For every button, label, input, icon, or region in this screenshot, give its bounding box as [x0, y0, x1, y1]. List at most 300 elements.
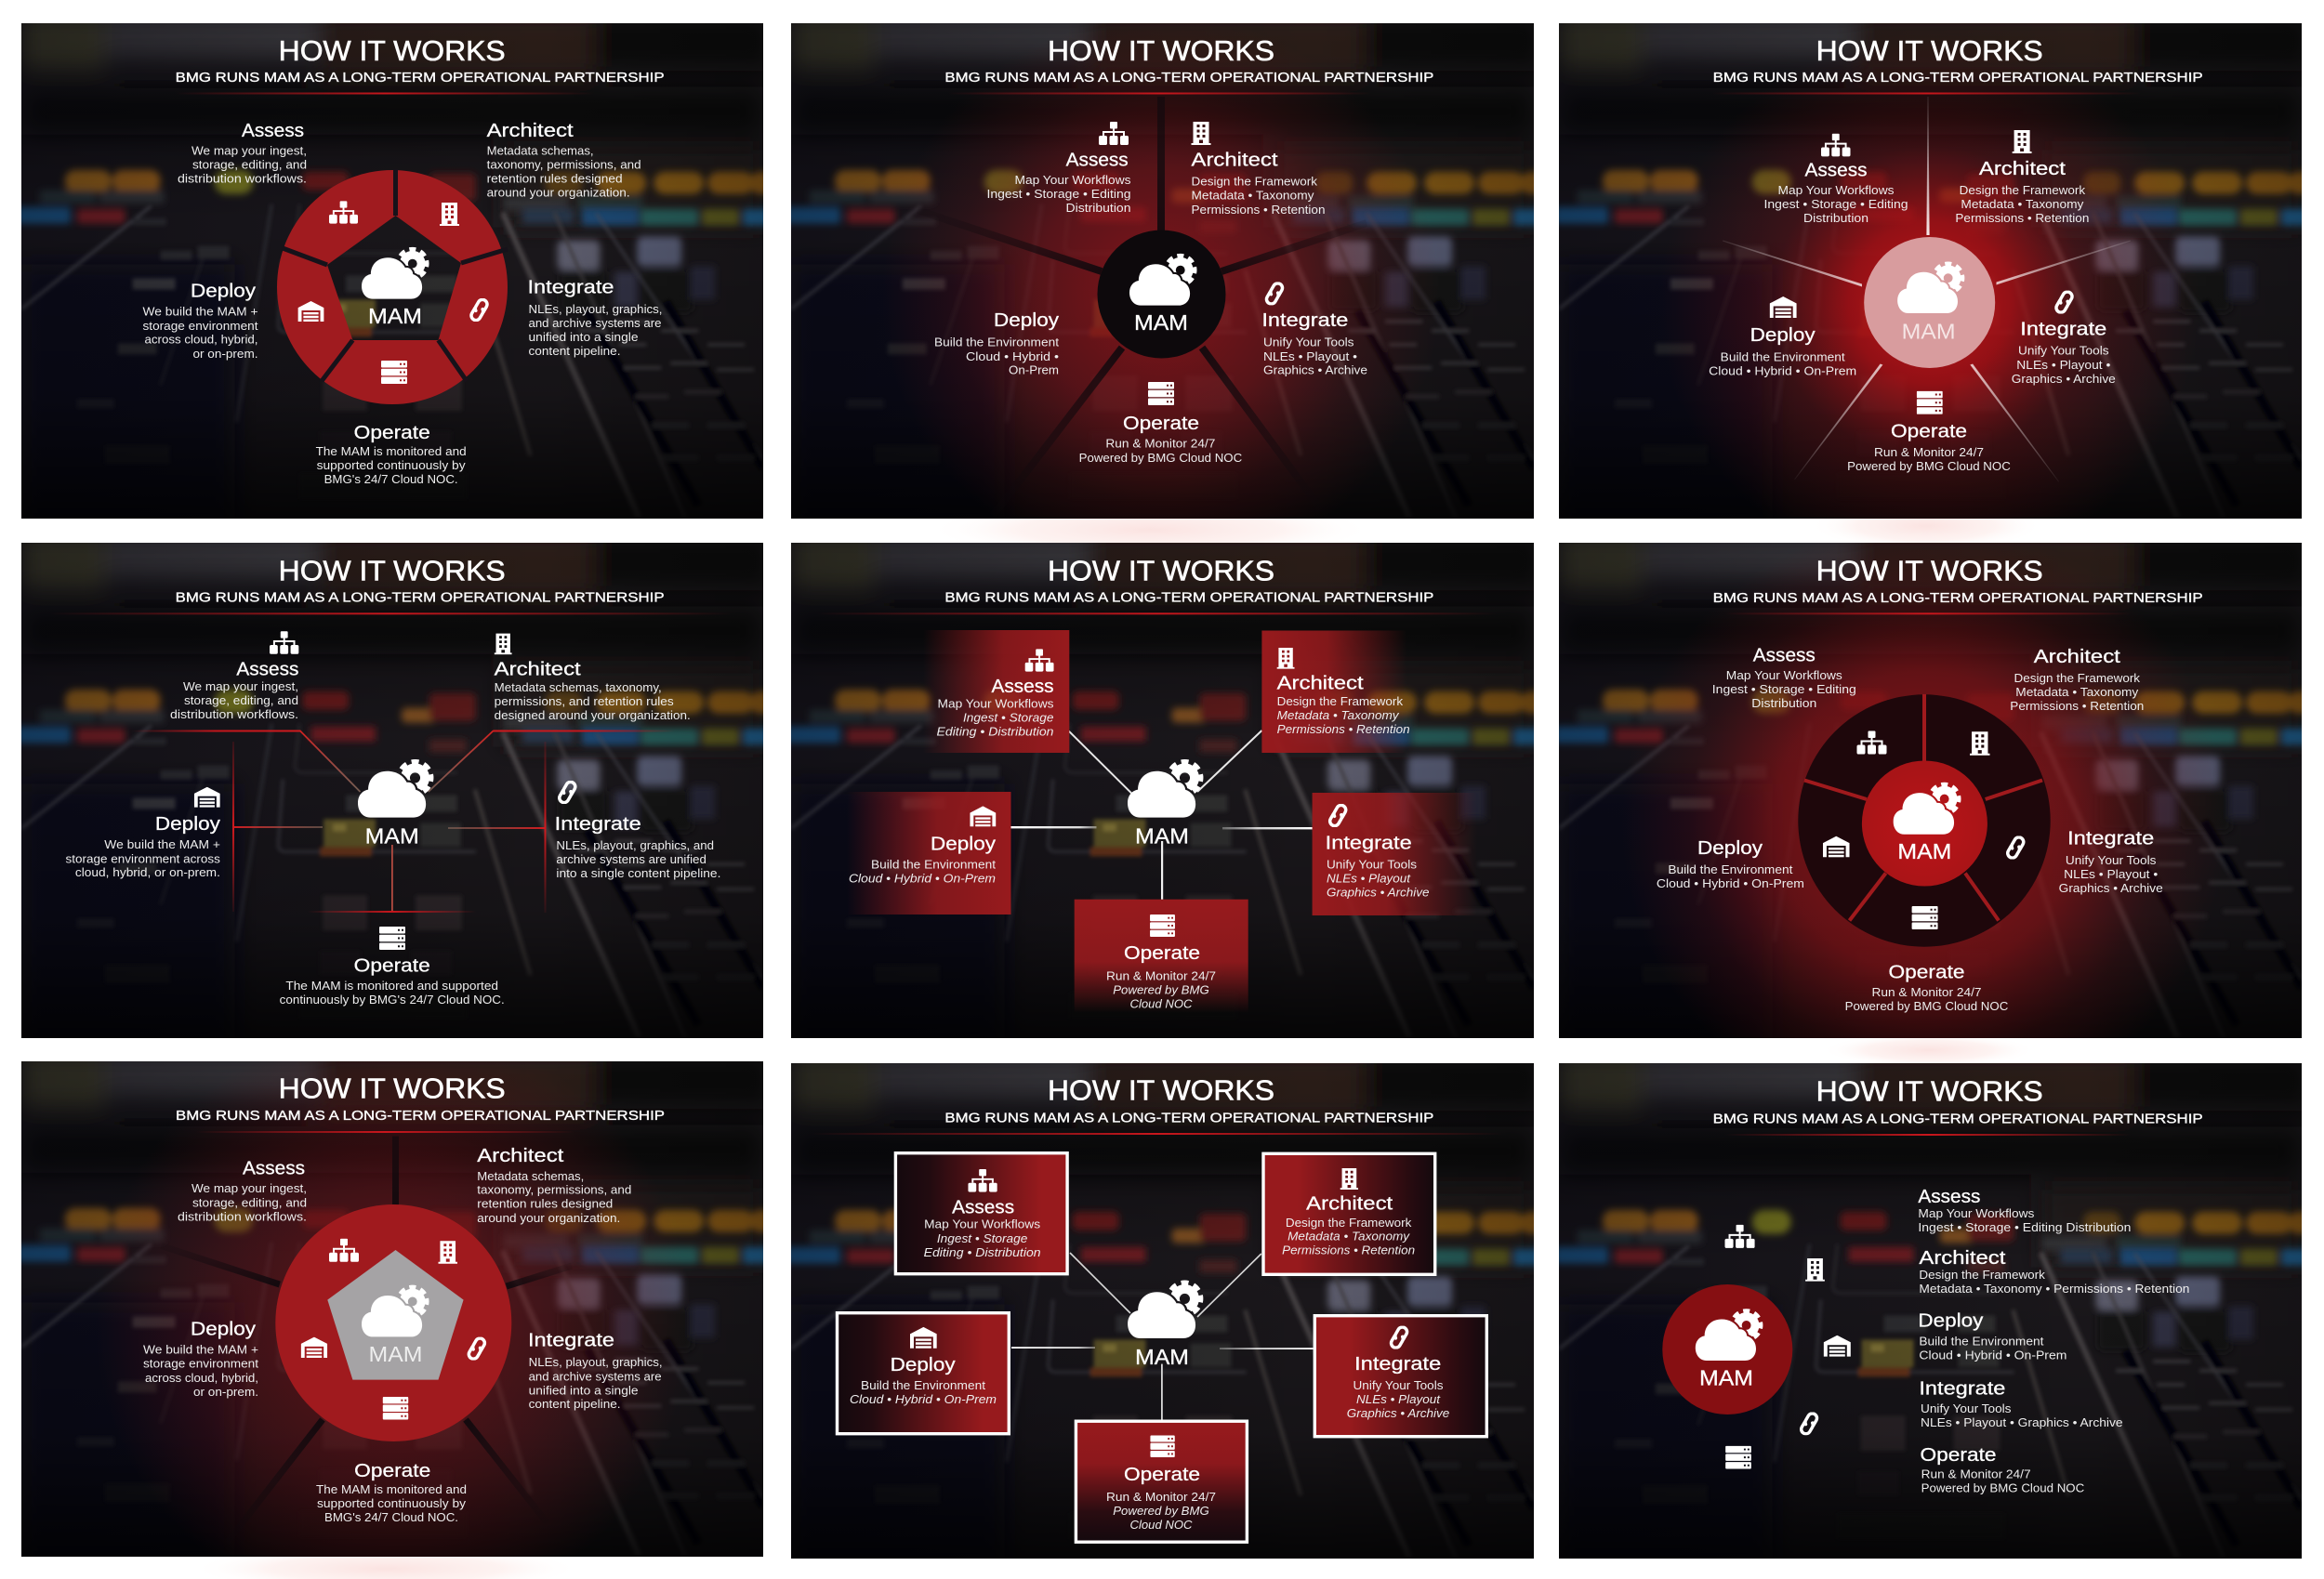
step: Deploy: Cloud • Hybrid • On-Prem [1709, 364, 1856, 378]
box: Deploy: Deploy [931, 835, 996, 855]
box: Assess [923, 630, 1069, 753]
step: Architect: Design the Framework [1960, 183, 2086, 197]
hub: MAM: MAM [1902, 320, 1956, 344]
step: Architect [1955, 130, 2089, 225]
step: Operate: Powered by BMG Cloud NOC [1921, 1481, 2084, 1494]
step: Deploy: or on-prem. [193, 1385, 258, 1399]
icon: building [1805, 1258, 1825, 1282]
step: Assess: Assess [242, 121, 304, 141]
step: Assess [987, 122, 1131, 215]
title rule [1725, 612, 2131, 614]
step: Operate [1079, 382, 1242, 465]
step: Operate [316, 1461, 467, 1524]
step: Architect [2010, 647, 2144, 713]
icon: hierarchy [1725, 1225, 1755, 1248]
step: Assess: Distribution [1803, 211, 1868, 225]
hub: MAM [1662, 1284, 1792, 1415]
box: Operate: Operate [1124, 1465, 1200, 1485]
title rule [1725, 1134, 2131, 1136]
dark spokes [161, 1137, 572, 1543]
title: HOW IT WORKS [1048, 554, 1274, 586]
step: Assess: storage, editing, and [192, 157, 307, 171]
red connectors [131, 730, 675, 913]
step: Assess: distribution workflows. [178, 1209, 307, 1223]
step: Deploy [934, 310, 1059, 377]
pink glow spill under panels [191, 502, 2042, 1579]
panel 7: red disc with grey pentagon [21, 1061, 763, 1557]
subtitle: BMG RUNS MAM AS A LONG-TERM OPERATIONAL PARTNERSHIP [176, 1108, 665, 1124]
step: Architect: Metadata • Taxonomy • Permissions • Retention [1919, 1282, 2189, 1296]
box: Deploy: Deploy [891, 1355, 956, 1375]
step: Integrate [1919, 1378, 2123, 1429]
box: Architect: Architect [1277, 673, 1364, 693]
step: Operate: Operate [354, 1461, 430, 1481]
icon: link [1800, 1412, 1818, 1436]
step: Assess: Ingest • Storage • Editing [1712, 682, 1856, 696]
box: Architect: Design the Framework [1286, 1216, 1412, 1230]
subtitle: BMG RUNS MAM AS A LONG-TERM OPERATIONAL PARTNERSHIP [1713, 590, 2203, 606]
step: Integrate: Graphics • Archive [1263, 363, 1367, 377]
step: Assess: Ingest • Storage • Editing [1764, 197, 1908, 211]
step: Architect: Metadata schemas, taxonomy, [495, 680, 662, 694]
wheel: dark segments with red dividers [1798, 694, 2051, 947]
white rays [1723, 97, 2131, 481]
dark spokes [918, 97, 1367, 516]
step: Assess: Map Your Workflows [1726, 668, 1842, 682]
hub: MAM: MAM [1135, 1345, 1189, 1369]
step: Operate: Powered by BMG Cloud NOC [1847, 459, 2011, 473]
step: Operate: Operate [1921, 1445, 1997, 1466]
step: Operate: Powered by BMG Cloud NOC [1845, 999, 2008, 1013]
step: Assess [170, 631, 298, 721]
step: Architect: Architect [495, 659, 581, 679]
box: Operate: Powered by BMG [1113, 982, 1209, 996]
step: Operate [1921, 1445, 2084, 1494]
hub: MAM [358, 762, 431, 848]
step: Integrate: NLEs, playout, graphics, [528, 302, 662, 316]
step: Operate: Operate [1891, 422, 1967, 442]
box: Deploy [837, 1313, 1009, 1434]
box: Integrate: NLEs • Playout [1327, 872, 1411, 885]
step: Architect: Design the Framework [1919, 1268, 2045, 1282]
step: Architect: Metadata schemas, [487, 143, 594, 158]
step: Operate [316, 423, 467, 486]
icon: server [1725, 1446, 1751, 1468]
step: Architect: Design the Framework [1192, 174, 1318, 188]
box: Architect [1261, 630, 1410, 753]
step: Architect: permissions, and retention rules [495, 694, 674, 708]
box: Deploy: Build the Environment [861, 1378, 985, 1392]
step: Integrate [2012, 290, 2116, 386]
step: Assess: We map your ingest, [191, 143, 307, 158]
title rule [176, 93, 594, 95]
box: Integrate: Unify Your Tools [1353, 1378, 1444, 1392]
hub: MAM [362, 1287, 427, 1366]
step: Architect [487, 121, 641, 200]
icon: hierarchy [329, 1239, 359, 1262]
red disc [275, 1204, 511, 1441]
subtitle: BMG RUNS MAM AS A LONG-TERM OPERATIONAL PARTNERSHIP [176, 70, 665, 86]
icon: warehouse [298, 301, 324, 322]
title: HOW IT WORKS [279, 554, 506, 586]
red glow [882, 15, 1440, 572]
panel 9: left hub with text list [1559, 1063, 2302, 1559]
step: Assess: Assess [236, 659, 298, 679]
panel 6: dark wheel with red hub [1559, 543, 2302, 1038]
subtitle: BMG RUNS MAM AS A LONG-TERM OPERATIONAL PARTNERSHIP [944, 1110, 1433, 1126]
step: Architect: Architect [477, 1146, 564, 1166]
icon: warehouse [1824, 1336, 1851, 1357]
step: Operate: BMG's 24/7 Cloud NOC. [324, 1510, 458, 1524]
icon: server [381, 361, 407, 384]
step: Integrate [2059, 828, 2163, 895]
box: Integrate: Unify Your Tools [1327, 857, 1418, 872]
icon: warehouse [1823, 836, 1850, 857]
step: Deploy: Build the Environment [1721, 349, 1845, 364]
box: Architect: Permissions • Retention [1282, 1243, 1415, 1257]
step: Deploy: or on-prem. [193, 347, 258, 361]
box: Operate [1076, 1421, 1247, 1542]
step: Assess [1712, 646, 1856, 710]
red glow [96, 1025, 691, 1579]
box: Architect: Design the Framework [1277, 694, 1404, 708]
step: Architect: around your organization. [487, 186, 630, 200]
step: Operate: continuously by BMG's 24/7 Cloud NOC. [280, 993, 505, 1007]
step: Integrate: Integrate [2067, 828, 2154, 849]
title rule [948, 93, 1371, 95]
step: Deploy: Cloud • Hybrid • [966, 349, 1059, 363]
step: Operate: Operate [354, 423, 430, 443]
step: Deploy [143, 281, 258, 361]
step: Integrate [528, 278, 662, 358]
icon: server [1912, 906, 1938, 929]
red glow [1622, 520, 2226, 1125]
step: Assess: Map Your Workflows [1918, 1206, 2035, 1220]
step: Architect: Permissions • Retention [1192, 203, 1326, 217]
step: Integrate: Unify Your Tools [1921, 1401, 2012, 1415]
step: Integrate: Integrate [2020, 320, 2106, 340]
step: Architect [477, 1146, 631, 1225]
title: HOW IT WORKS [1816, 555, 2043, 587]
box: Deploy: Cloud • Hybrid • On-Prem [849, 872, 996, 885]
box: Deploy: Build the Environment [871, 857, 996, 872]
step: Integrate: into a single content pipeline. [556, 866, 720, 880]
step: Operate: BMG's 24/7 Cloud NOC. [324, 472, 458, 486]
step: Deploy: Deploy [1750, 325, 1816, 346]
panel 5: fading red boxes with white connectors [791, 543, 1534, 1038]
box: Integrate: NLEs • Playout [1356, 1392, 1441, 1406]
step: Integrate: Unify Your Tools [2018, 344, 2109, 357]
step: Deploy: Cloud • Hybrid • On-Prem [1657, 876, 1804, 890]
box: Operate: Cloud NOC [1130, 1518, 1193, 1532]
title: HOW IT WORKS [1816, 1074, 2043, 1108]
step: Integrate: Unify Your Tools [1263, 336, 1354, 349]
step: Integrate: and archive systems are [529, 1369, 662, 1383]
subtitle: BMG RUNS MAM AS A LONG-TERM OPERATIONAL PARTNERSHIP [1713, 1111, 2203, 1126]
hub: MAM: MAM [368, 1342, 422, 1366]
subtitle: BMG RUNS MAM AS A LONG-TERM OPERATIONAL PARTNERSHIP [944, 589, 1433, 606]
step: Integrate: NLEs • Playout • [1263, 349, 1357, 363]
step: Assess: Ingest • Storage • Editing Distribution [1918, 1220, 2131, 1234]
step: Integrate [555, 781, 720, 880]
step: Deploy: We build the MAM + [143, 305, 258, 319]
hub: MAM [1128, 1283, 1201, 1369]
step: Architect: Architect [1192, 150, 1278, 170]
step: Architect: Metadata • Taxonomy [2015, 685, 2139, 699]
step: Deploy: storage environment across [65, 851, 220, 865]
step: Operate: Operate [1123, 414, 1199, 434]
hub: MAM [362, 249, 427, 328]
box: Integrate: Integrate [1326, 833, 1412, 853]
title rule [1712, 93, 2141, 95]
step: Architect: retention rules designed [487, 171, 623, 186]
step: Deploy: We build the MAM + [104, 837, 220, 851]
title: HOW IT WORKS [1048, 34, 1274, 67]
step: Architect: Metadata • Taxonomy [1961, 197, 2084, 211]
step: Deploy: Cloud • Hybrid • On-Prem [1919, 1348, 2067, 1362]
panel 4: red connector lines [21, 543, 763, 1038]
step: Deploy: Deploy [155, 814, 220, 835]
box: Architect [1263, 1153, 1435, 1274]
icon: link [468, 1336, 486, 1361]
box: Operate: Powered by BMG [1113, 1504, 1209, 1518]
hub: MAM: MAM [1134, 310, 1188, 335]
hub: MAM: MAM [365, 823, 419, 848]
hub: MAM [1097, 230, 1225, 359]
step: Integrate: NLEs • Playout • [2016, 358, 2111, 372]
step: Integrate: NLEs, playout, graphics, and [556, 838, 714, 852]
icon: server [383, 1397, 408, 1420]
step: Deploy: Deploy [1697, 838, 1763, 859]
box: Architect: Architect [1306, 1194, 1393, 1215]
box: Assess: Assess [991, 677, 1054, 697]
step: Deploy: On-Prem [1009, 363, 1059, 377]
step: Integrate: archive systems are unified [556, 852, 706, 866]
step: Architect [1919, 1248, 2189, 1296]
step: Architect: Design the Framework [2014, 671, 2141, 685]
step: Assess: Assess [243, 1159, 305, 1179]
step: Integrate: Graphics • Archive [2059, 881, 2163, 895]
title: HOW IT WORKS [279, 34, 506, 67]
white connectors [1011, 730, 1313, 900]
step: Operate: Powered by BMG Cloud NOC [1079, 451, 1242, 465]
step: Integrate: NLEs • Playout • Graphics • Archive [1921, 1415, 2123, 1429]
step: Assess: distribution workflows. [178, 171, 307, 186]
step: Deploy: storage environment [143, 1357, 258, 1371]
step: Integrate: and archive systems are [528, 316, 662, 330]
step: Operate: Run & Monitor 24/7 [1872, 985, 1982, 999]
step: Deploy [1918, 1311, 2067, 1362]
step: Integrate: Integrate [1261, 310, 1348, 331]
box: Assess: Ingest • Storage [963, 710, 1054, 724]
step: Deploy [1709, 296, 1856, 378]
title: HOW IT WORKS [279, 1072, 506, 1104]
box: Assess: Editing • Distribution [937, 724, 1054, 738]
hub: MAM: MAM [368, 304, 422, 328]
step: Architect: taxonomy, permissions, and [477, 1183, 631, 1197]
step: Assess: Assess [1753, 646, 1816, 666]
step: Deploy: Deploy [1918, 1311, 1983, 1332]
step: Operate [1847, 391, 2011, 473]
step: Architect: retention rules designed [477, 1197, 613, 1210]
step: Assess: Assess [1918, 1187, 1980, 1207]
box: Integrate [1314, 1316, 1486, 1437]
icon: building [1970, 731, 1989, 756]
icon: link [2006, 836, 2026, 860]
step: Assess: We map your ingest, [183, 679, 298, 693]
step: Operate: Run & Monitor 24/7 [1105, 437, 1215, 451]
step: Architect: around your organization. [477, 1211, 620, 1225]
step: Architect: designed around your organization. [495, 708, 691, 722]
white connectors [1011, 1253, 1314, 1420]
step: Integrate: unified into a single [529, 1383, 639, 1397]
step: Integrate: Integrate [1919, 1378, 2005, 1399]
step: Architect: Permissions • Retention [1955, 211, 2089, 225]
step: Assess [1918, 1187, 2131, 1234]
step: Integrate: content pipeline. [529, 1397, 621, 1411]
hub: MAM: MAM [1699, 1366, 1753, 1390]
title: HOW IT WORKS [1048, 1073, 1274, 1106]
hub: MAM [1128, 762, 1201, 848]
hub: MAM [1864, 237, 1995, 368]
icon: building [439, 1241, 457, 1264]
step: Deploy: Deploy [994, 310, 1059, 331]
box: Assess: Editing • Distribution [924, 1245, 1041, 1259]
panel 8: outlined gradient boxes [791, 1063, 1534, 1559]
box: Assess: Assess [952, 1197, 1014, 1217]
step: Operate: The MAM is monitored and [316, 1482, 467, 1496]
subtitle: BMG RUNS MAM AS A LONG-TERM OPERATIONAL PARTNERSHIP [1713, 70, 2203, 86]
title: HOW IT WORKS [1816, 34, 2043, 67]
step: Assess: Distribution [1065, 201, 1130, 215]
step: Integrate: Unify Your Tools [2066, 853, 2157, 867]
box: Architect: Permissions • Retention [1277, 722, 1410, 736]
step: Architect: Permissions • Retention [2010, 699, 2144, 713]
panel 3: pale hub with white rays [1559, 23, 2302, 519]
box: Operate: Run & Monitor 24/7 [1106, 968, 1216, 982]
step: Assess: Map Your Workflows [1015, 173, 1131, 187]
step: Assess [178, 1159, 307, 1223]
step: Integrate: Integrate [528, 278, 614, 298]
box: Integrate: Graphics • Archive [1347, 1406, 1449, 1420]
step: Assess: Ingest • Storage • Editing [987, 187, 1130, 201]
step: Architect [495, 634, 691, 722]
step: Assess: Assess [1066, 150, 1129, 170]
step: Deploy: across cloud, hybrid, [145, 1371, 258, 1385]
step: Architect: Metadata schemas, [477, 1169, 584, 1183]
step: Architect: Architect [2034, 647, 2120, 667]
step: Operate: Operate [354, 955, 430, 976]
step: Integrate: NLEs • Playout • [2064, 867, 2159, 881]
step: Deploy: cloud, hybrid, or on-prem. [75, 865, 220, 879]
box: Architect: Metadata • Taxonomy [1277, 708, 1400, 722]
box: Operate: Run & Monitor 24/7 [1106, 1490, 1216, 1504]
step: Integrate: NLEs, playout, graphics, [529, 1355, 663, 1369]
icon: hierarchy [1857, 730, 1887, 755]
panel 2: dark hub with dark spokes on red glow [791, 23, 1534, 519]
step: Deploy: Build the Environment [1919, 1335, 2044, 1349]
step: Operate: supported continuously by [317, 458, 466, 472]
step: Assess: storage, editing, and [184, 693, 298, 707]
hub: MAM: MAM [1897, 839, 1951, 863]
step: Integrate: Graphics • Archive [2012, 372, 2116, 386]
hub: MAM: MAM [1135, 823, 1189, 848]
step: Deploy: Build the Environment [1668, 862, 1793, 876]
title rule [50, 612, 731, 614]
step: Integrate [1261, 282, 1367, 377]
box: Operate [1075, 900, 1248, 1013]
title rule [812, 1133, 1502, 1135]
icon: building [440, 203, 459, 226]
box: Assess [895, 1153, 1067, 1274]
box: Operate: Operate [1124, 943, 1200, 964]
step: Operate: The MAM is monitored and [316, 444, 467, 458]
step: Assess: Assess [1805, 160, 1867, 180]
step: Assess: We map your ingest, [191, 1181, 307, 1195]
box: Deploy: Cloud • Hybrid • On-Prem [850, 1392, 997, 1406]
step: Deploy [143, 1320, 258, 1399]
step: Operate: Operate [1889, 963, 1965, 983]
subtitle: BMG RUNS MAM AS A LONG-TERM OPERATIONAL PARTNERSHIP [176, 589, 665, 606]
icon: hierarchy [329, 201, 358, 224]
step: Architect: Metadata • Taxonomy [1192, 189, 1314, 203]
step: Assess [1764, 134, 1908, 225]
step: Operate: Run & Monitor 24/7 [1921, 1467, 2031, 1481]
step: Integrate: Integrate [555, 814, 641, 835]
subtitle: BMG RUNS MAM AS A LONG-TERM OPERATIONAL PARTNERSHIP [944, 70, 1433, 86]
step: Operate: supported continuously by [317, 1496, 467, 1510]
step: Operate [1845, 963, 2008, 1013]
step: Deploy: across cloud, hybrid, [145, 333, 258, 347]
step: Operate: Run & Monitor 24/7 [1874, 445, 1984, 459]
step: Assess: Map Your Workflows [1777, 183, 1895, 197]
step: Integrate: content pipeline. [528, 344, 621, 358]
box: Assess: Ingest • Storage [937, 1231, 1027, 1245]
red glow [1660, 33, 2199, 572]
step: Deploy: We build the MAM + [143, 1342, 258, 1356]
step: Integrate: Integrate [528, 1330, 614, 1350]
icon: warehouse [301, 1337, 327, 1358]
step: Deploy: storage environment [143, 319, 258, 333]
hub: MAM [1862, 760, 1987, 887]
box: Deploy [847, 792, 1011, 915]
step: Deploy: Build the Environment [934, 336, 1059, 349]
step: Assess: storage, editing, and [192, 1195, 307, 1209]
box: Integrate: Integrate [1354, 1354, 1441, 1375]
step: Operate [280, 927, 505, 1007]
step: Deploy [1657, 838, 1804, 890]
step: Assess [178, 121, 307, 186]
step: Architect: Architect [1919, 1248, 2006, 1269]
step: Architect [1192, 122, 1326, 217]
box: Architect: Metadata • Taxonomy [1287, 1230, 1411, 1243]
wheel: five red segments around a pentagon [277, 169, 508, 404]
step: Architect: taxonomy, permissions, and [487, 158, 641, 172]
step: Deploy: Deploy [191, 281, 256, 301]
step: Deploy [65, 787, 220, 879]
grey pentagon [327, 1250, 464, 1380]
panel 1: segmented pentagon wheel [21, 23, 763, 519]
step: Operate: The MAM is monitored and supported [285, 979, 498, 993]
step: Assess: Distribution [1751, 696, 1816, 710]
title rule [196, 1131, 574, 1133]
box: Assess: Map Your Workflows [937, 696, 1054, 710]
step: Deploy: Deploy [191, 1320, 256, 1340]
box: Integrate [1313, 793, 1477, 915]
title rule [817, 612, 1497, 614]
box: Integrate: Graphics • Archive [1327, 885, 1430, 900]
step: Architect: Architect [487, 121, 574, 141]
